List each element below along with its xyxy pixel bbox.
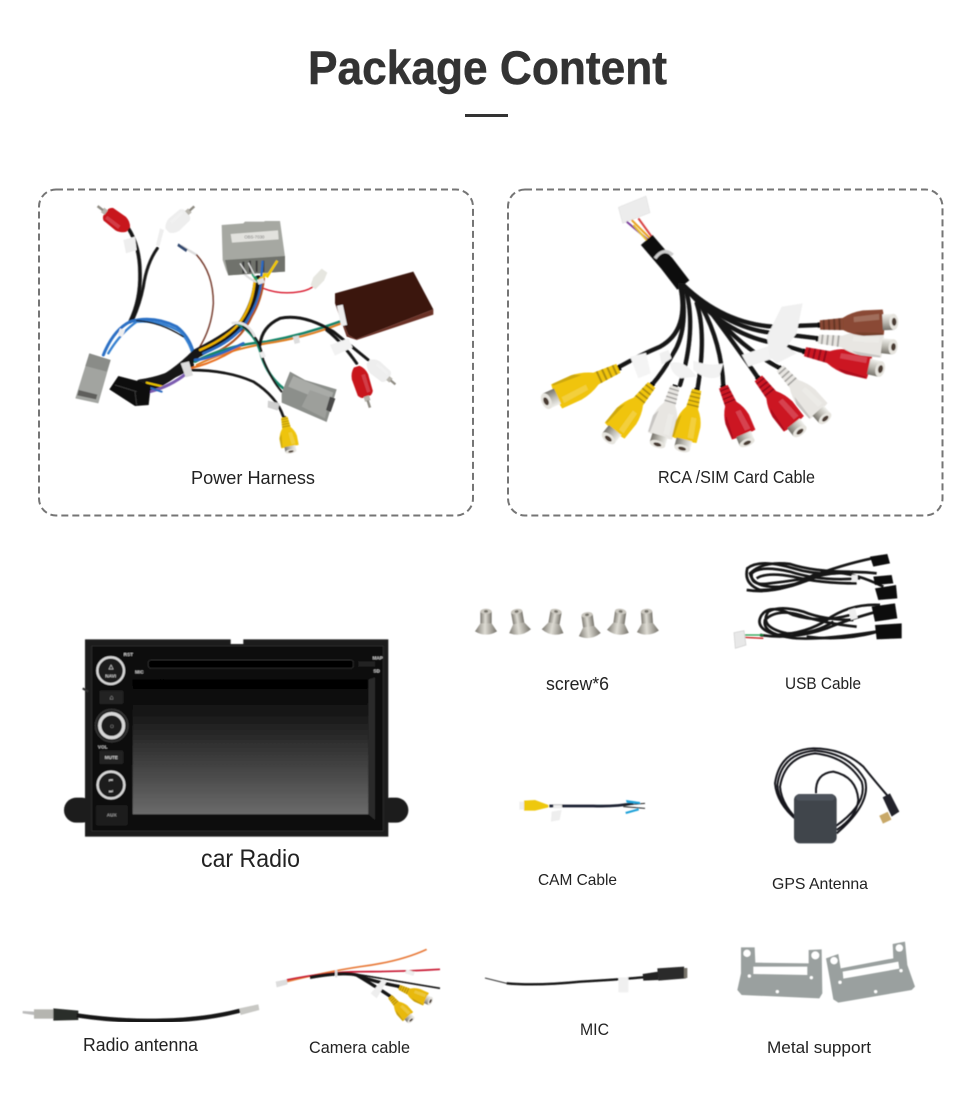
- RCA jacks: [536, 355, 626, 415]
- item: MIC: [485, 967, 687, 1039]
- label: camera cable: Camera cable: [309, 1038, 410, 1057]
- head unit illustration: [64, 639, 408, 837]
- label: GPS antenna: GPS Antenna: [772, 876, 868, 893]
- dark brown control box: [335, 272, 433, 339]
- label: MIC: MIC: [580, 1020, 609, 1039]
- label: CAM cable: CAM Cable: [538, 872, 617, 889]
- head unit illustration: ⏮: [109, 778, 114, 783]
- grey left connector: [75, 353, 111, 403]
- item: screws: [475, 607, 659, 694]
- label: metal support: Metal support: [767, 1038, 871, 1057]
- head unit illustration: RST: [124, 652, 133, 657]
- head unit illustration: MUTE: [105, 755, 118, 760]
- title: Package Content: [308, 41, 667, 94]
- yellow RCA jack: [275, 415, 300, 455]
- head unit illustration: SD: [373, 669, 381, 674]
- red and white RCA plugs, right: [349, 364, 378, 410]
- grey module with label: [222, 221, 285, 275]
- cable ties: [118, 328, 125, 337]
- head unit illustration: ⏭: [109, 788, 114, 793]
- head unit illustration: VOL: [98, 744, 108, 749]
- metal brackets photo: [737, 942, 915, 1003]
- radio antenna photo: [23, 1004, 259, 1021]
- item: USB cable: [734, 554, 902, 693]
- RCA cable photo: [536, 196, 899, 455]
- item: car radio: [64, 639, 408, 873]
- label: RCA SIM card cable: RCA /SIM Card Cable: [658, 467, 815, 487]
- wire labels: [630, 353, 651, 378]
- item: metal support: [737, 942, 915, 1057]
- camera cable photo: [276, 949, 440, 1026]
- head unit illustration: ○: [110, 721, 114, 730]
- head unit illustration: NAVI: [105, 674, 116, 679]
- label: USB cable: USB Cable: [785, 675, 861, 693]
- head unit illustration: ⌂: [110, 694, 114, 701]
- item: CAM cable: [519, 800, 645, 889]
- panel: RCA SIM card cable: [508, 190, 942, 516]
- item: camera cable: [276, 949, 440, 1057]
- GPS antenna photo: [775, 748, 899, 843]
- label: car radio: car Radio: [201, 845, 300, 873]
- head unit illustration: MIC: [135, 669, 144, 674]
- red and white RCA plugs, top left: [92, 199, 133, 236]
- black multi-pin connector: [109, 376, 151, 406]
- CAM cable photo: [519, 800, 645, 822]
- grey large connector: [282, 372, 337, 422]
- harness photo: OBS-7030: [244, 234, 265, 239]
- label: radio antenna: Radio antenna: [83, 1035, 199, 1055]
- panel frame: [39, 190, 473, 516]
- panel: power harness: [39, 190, 473, 516]
- item: GPS antenna: [772, 748, 899, 893]
- screw icons: [475, 607, 659, 639]
- item: radio antenna: [23, 1004, 259, 1055]
- head unit illustration: MAP: [372, 655, 383, 660]
- label: power harness: Power Harness: [191, 468, 315, 488]
- label: screws: screw*6: [546, 674, 609, 694]
- microphone photo: [485, 967, 687, 992]
- harness photo: [75, 199, 433, 455]
- USB cable photo: [734, 554, 902, 648]
- title underline: [465, 114, 508, 117]
- panel frame: [508, 190, 942, 516]
- head unit illustration: △: [108, 664, 114, 671]
- head unit illustration: AUX: [107, 813, 117, 818]
